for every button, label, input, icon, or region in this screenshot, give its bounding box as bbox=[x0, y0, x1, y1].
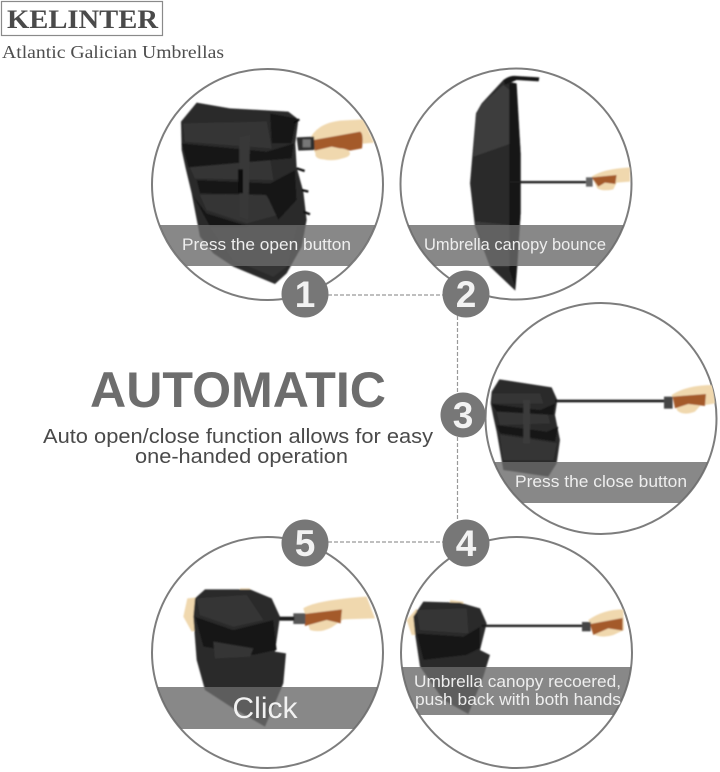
heading: AUTOMATIC: AUTOMATIC bbox=[90, 362, 386, 418]
badge: step 3: 3 bbox=[453, 395, 473, 436]
caption: Umbrella canopy bounce bbox=[424, 235, 606, 254]
panel: step 3 press the close button bbox=[485, 303, 717, 534]
badge: step 5 bbox=[282, 520, 328, 566]
badge: step 2: 2 bbox=[456, 274, 476, 315]
photo: umbrella held with both hands bbox=[407, 600, 624, 714]
description text: Auto open/close function allows for easy bbox=[43, 426, 433, 448]
panel: step 5 click bbox=[152, 537, 383, 768]
description text: one-handed operation bbox=[135, 446, 348, 468]
caption: Press the close button bbox=[515, 472, 687, 491]
photo: folded umbrella with wooden handle bbox=[181, 103, 374, 284]
panel: step 2 umbrella canopy bounce bbox=[400, 68, 632, 300]
caption: Press the open button bbox=[182, 235, 351, 254]
panel: step 1 press the open button bbox=[152, 69, 383, 300]
photo: closed umbrella with extended shaft bbox=[491, 379, 715, 477]
badge: step 5: 5 bbox=[295, 523, 315, 564]
badge: step 4: 4 bbox=[456, 523, 477, 564]
badge: step 4 bbox=[442, 520, 490, 566]
panel: step 4 push back with both hands bbox=[401, 537, 632, 768]
caption: Umbrella canopy recoered, bbox=[414, 672, 621, 691]
badge: step 1 bbox=[282, 270, 328, 318]
badge: step 2 bbox=[442, 270, 490, 318]
badge: step 3 bbox=[440, 392, 486, 438]
tagline: Atlantic Galician Umbrellas bbox=[2, 42, 224, 62]
photo: umbrella pushed closed bbox=[183, 588, 375, 727]
logo: KELINTER: KELINTER bbox=[7, 5, 158, 34]
photo: open umbrella side view bbox=[470, 76, 630, 291]
caption: push back with both hands bbox=[415, 690, 621, 709]
description text bbox=[43, 426, 433, 468]
badge: step 1: 1 bbox=[295, 274, 315, 315]
caption: Click bbox=[232, 692, 298, 725]
caption bbox=[414, 672, 621, 709]
dashed connector lines bbox=[328, 295, 458, 542]
